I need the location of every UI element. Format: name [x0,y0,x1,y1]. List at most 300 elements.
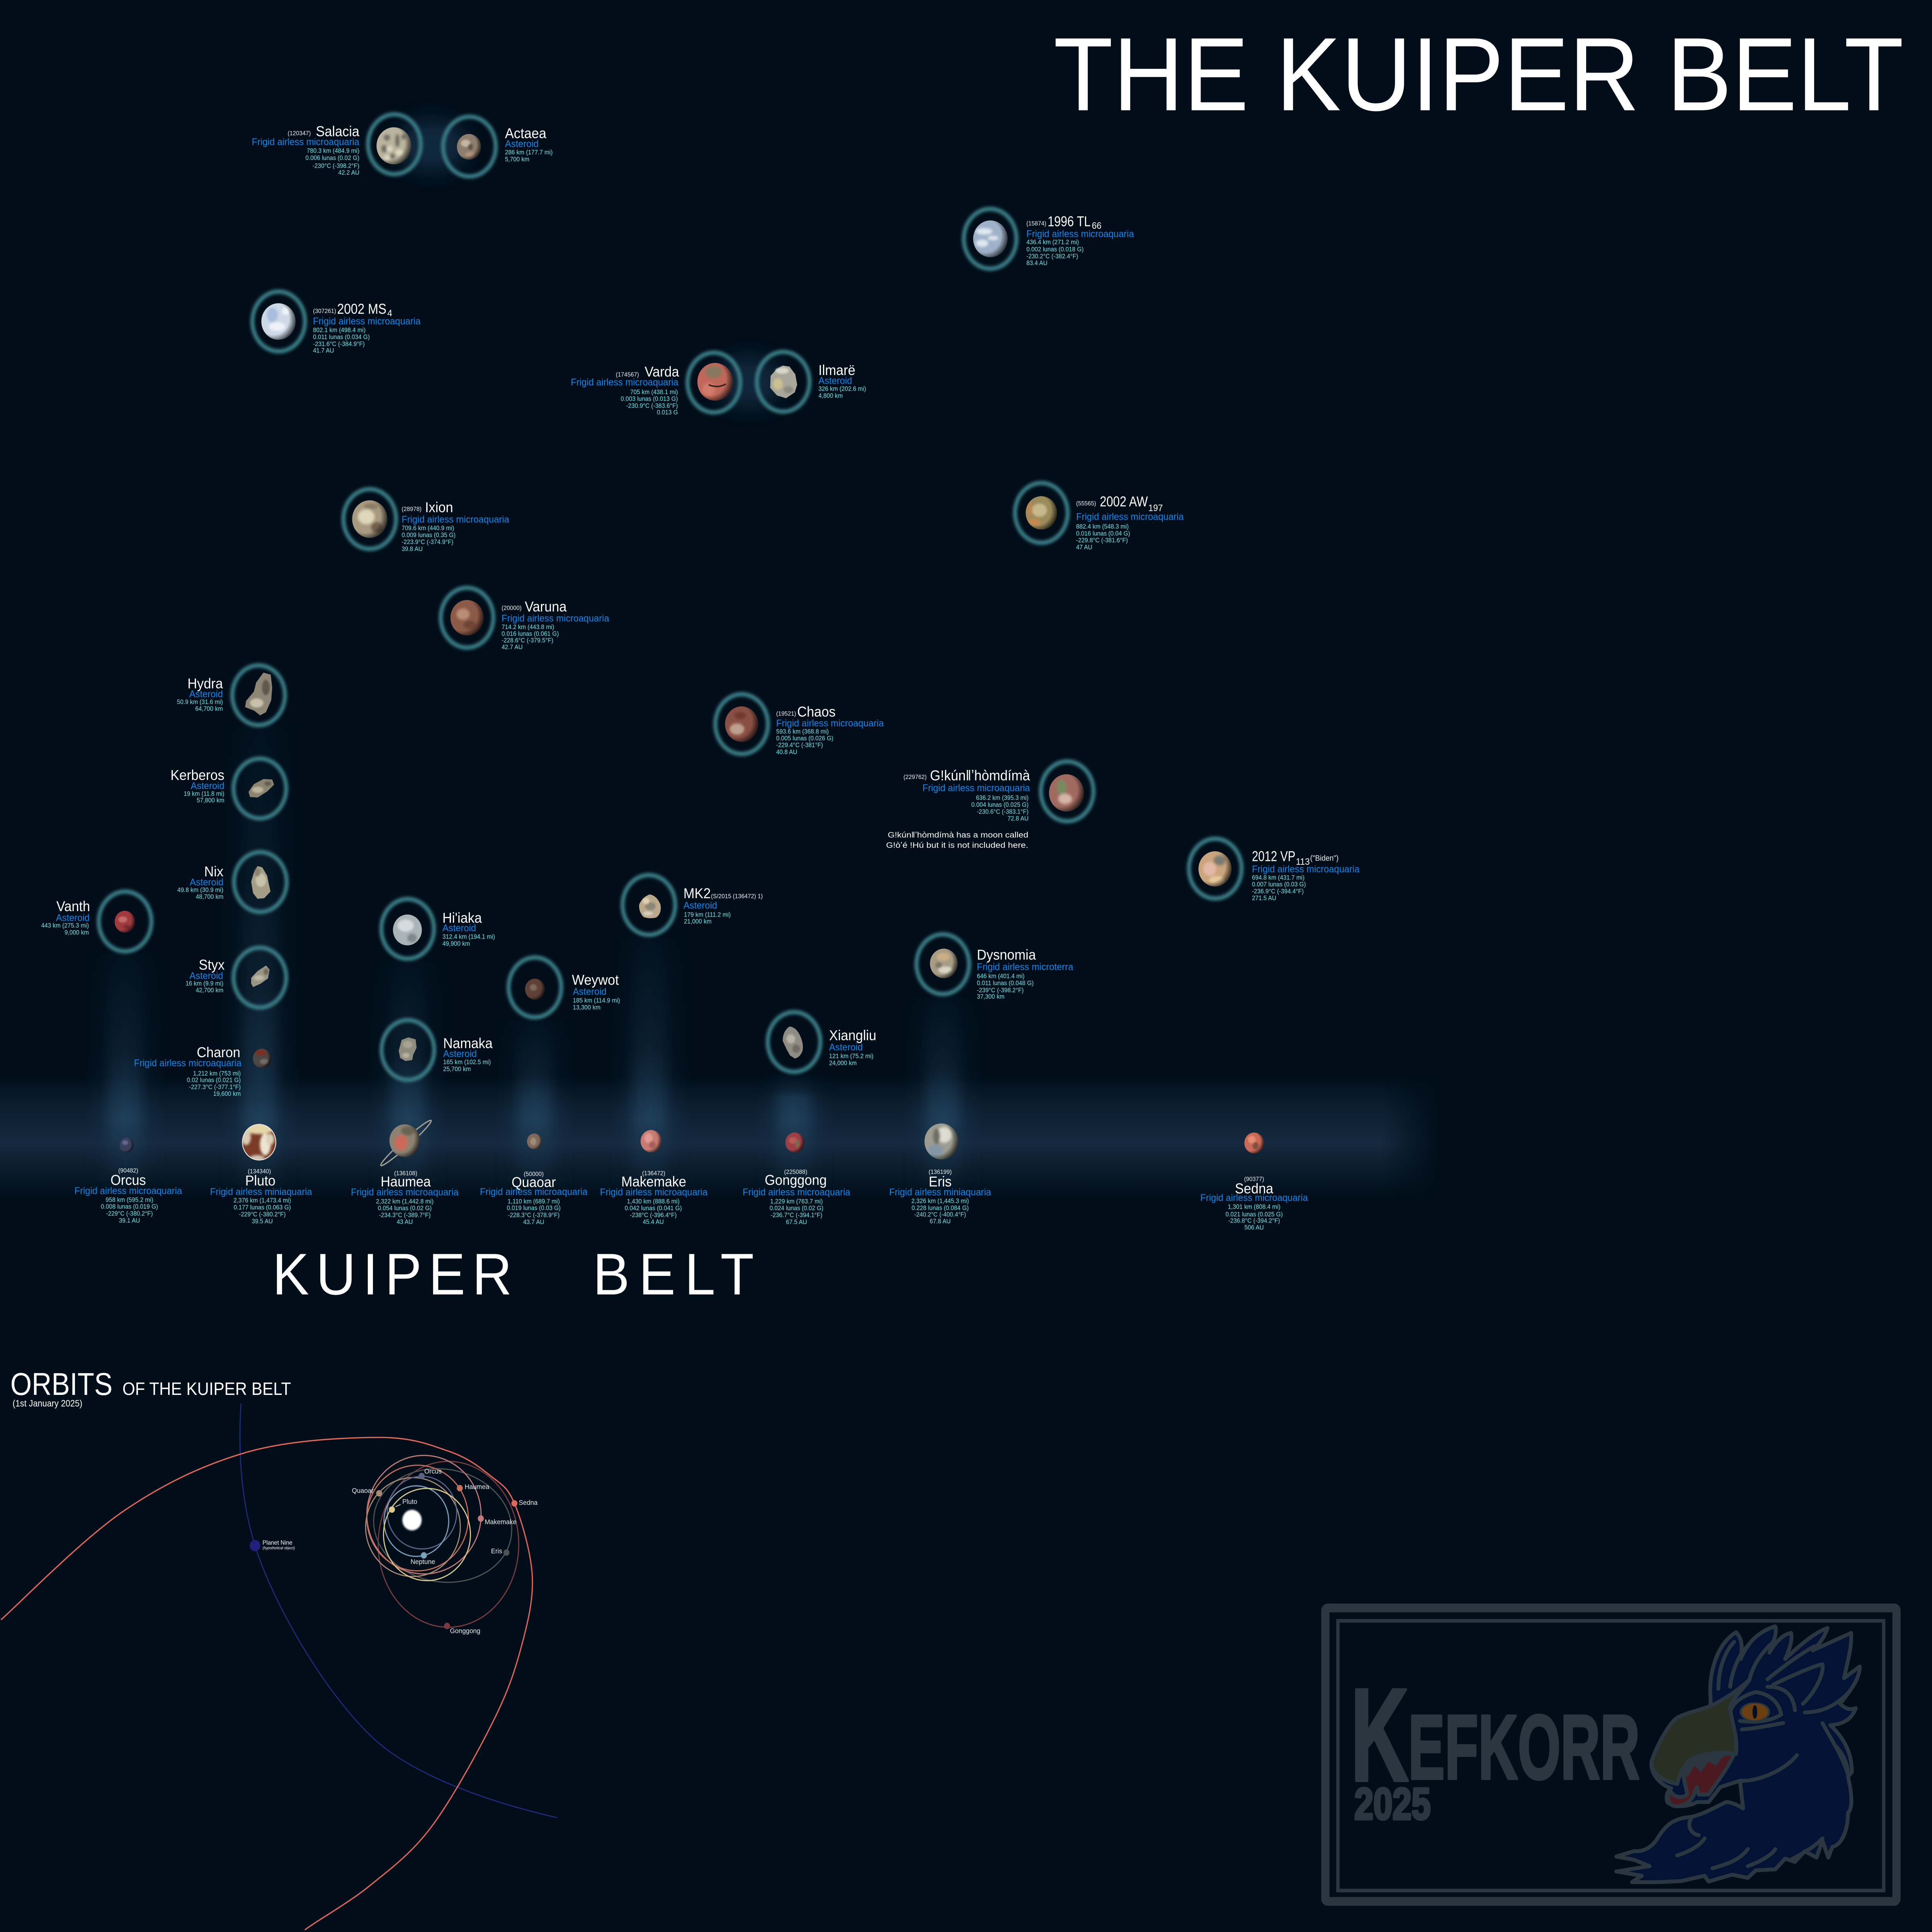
label: (20000) [502,605,522,612]
planet [527,1133,542,1150]
label: 0.007 lunas (0.03 G) [1252,881,1306,888]
label: MK2 [684,886,711,901]
marker: Planet Nine [250,1539,295,1551]
asteroid [783,1027,803,1058]
marker: Haumea: Haumea [464,1483,490,1490]
ring [379,1118,433,1168]
label: 271.5 AU [1252,895,1276,901]
label [571,364,679,416]
ring [1015,483,1068,543]
orbits heading: ORBITS [10,1366,112,1402]
label: -230.9°C (-383.6°F) [626,403,678,409]
ring [232,665,285,725]
orbit: Sedna [1,1437,532,1930]
label: 43 AU [397,1219,413,1225]
label: 0.011 lunas (0.034 G) [313,334,370,340]
note about moon: Gǃkúnǁʼhòmdímà has a moon called [888,831,1028,839]
label: 83.4 AU [1026,260,1048,267]
body: Hydra [177,665,285,725]
label: Frigid airless microaquaria [571,377,679,388]
label: Varda [645,364,679,380]
label: -231.6°C (-384.9°F) [313,341,365,347]
sun [402,1510,422,1531]
label: 42.7 AU [502,644,523,651]
mascot bird [1616,1626,1860,1882]
label: Orcus [111,1172,146,1188]
asteroid [248,779,274,798]
label [401,499,509,553]
label: Frigid airless microaquaria [313,316,421,327]
body: Gkunhomdima [903,762,1094,822]
marker: Quaoar [352,1486,382,1497]
body: Kerberos [170,759,286,818]
label: Hydra [187,675,223,692]
planet [241,1121,276,1162]
label: Frigid airless microaquaria [600,1187,707,1198]
marker: Pluto [389,1497,417,1513]
label [572,972,620,1011]
body: Weywot [509,957,620,1017]
label: 2012 VP [1252,849,1296,864]
marker: Gonggong [444,1623,480,1635]
label: 0.042 lunas (0.041 G) [625,1205,682,1212]
label: Chaos [797,704,835,720]
label: (55565) [1076,500,1096,507]
label: Ixion [425,499,453,515]
label: 5,700 km [505,156,529,163]
label: Asteroid [505,139,539,150]
label: Frigid airless microaquaria [134,1058,242,1069]
body: Styx [185,948,286,1007]
label: 1,430 km (888.6 mi) [627,1198,680,1205]
marker: Planet Nine: Planet Nine [262,1539,293,1546]
label: 0.004 lunas (0.025 G) [971,802,1029,808]
ring [1041,762,1094,821]
label [889,1169,991,1225]
label: -229.4°C (-381°F) [776,742,823,748]
label: -223.9°C (-374.9°F) [401,539,453,546]
label: 0.011 lunas (0.048 G) [977,980,1034,986]
planet [930,949,957,978]
label: 13,300 km [573,1004,600,1011]
label: Frigid airless microaquaria [1252,864,1360,875]
wordmark: K [1350,1661,1409,1809]
label: 21,000 km [684,918,712,925]
label: Asteroid [191,781,224,791]
label: 646 km (401.4 mi) [977,973,1025,980]
marker: Makemake: Makemake [485,1518,517,1526]
label: 709.6 km (440.9 mi) [401,525,454,532]
asteroid [251,966,270,987]
label: (28978) [401,506,422,513]
marker: Eris: Eris [491,1547,502,1555]
ring [252,292,305,351]
label: 882.4 km (548.3 mi) [1076,524,1129,530]
label: 2,376 km (1,473.4 mi) [233,1197,291,1204]
label: Styx [199,957,224,973]
Kuiper belt glow band [0,1087,1426,1185]
label: 45.4 AU [643,1219,664,1225]
label: Frigid airless microaquaria [922,783,1030,794]
body: Chaos [715,694,884,755]
label: Asteroid [443,1049,477,1060]
marker: Makemake [478,1515,517,1526]
label: Ilmarë [818,362,855,378]
watermark: Kefkorr 2025 [1325,1608,1896,1901]
label: Asteroid [442,923,476,934]
label [818,362,866,399]
orbit: Neptune [384,1486,449,1556]
label: 64,700 km [195,706,223,712]
label: 506 AU [1245,1225,1264,1231]
label [75,1167,182,1224]
wordmark [1350,1661,1640,1829]
label: -230.2°C (-382.4°F) [1026,253,1078,260]
label [252,124,359,176]
label: 286 km (177.7 mi) [505,149,553,156]
label [185,957,224,994]
label: 0.016 lunas (0.04 G) [1076,531,1130,537]
label: -230°C (-398.2°F) [313,163,359,170]
label: 50.9 km (31.6 mi) [177,699,223,706]
label: 39.8 AU [401,546,423,553]
label: (225088) [784,1169,807,1175]
asteroid [393,915,422,946]
label: Frigid airless microaquaria [776,718,884,729]
label: Nix [204,864,223,879]
label: -238°C (-396.4°F) [630,1212,677,1219]
ring [768,1012,820,1072]
label: -240.2°C (-400.4°F) [914,1211,966,1218]
label: Asteroid [829,1042,863,1053]
label: (15874) [1026,220,1046,227]
section label: KUIPER BELT: KUIPER [272,1242,512,1307]
label [684,886,763,925]
marker: Orcus: Orcus [424,1467,442,1475]
marker: Neptune: Neptune [410,1558,435,1565]
label: 1,229 km (763.7 mi) [770,1198,823,1205]
label: -227.3°C (-377.1°F) [189,1084,241,1091]
body: Dysnomia [917,934,1073,1000]
label: 66 [1092,220,1102,231]
label: 24,000 km [829,1060,857,1067]
orbit: Gonggong [378,1461,519,1627]
label: 436.4 km (271.2 mi) [1026,239,1079,246]
label: Frigid airless microaquaria [1076,512,1184,522]
ring [99,891,151,951]
label [443,1036,493,1073]
label [1076,494,1184,551]
label: Sedna [1235,1181,1274,1197]
orbits heading: OF THE KUIPER BELT [122,1379,291,1399]
label: 2,326 km (1,445.3 mi) [912,1198,969,1204]
asteroid [639,895,661,918]
orbits heading [10,1366,291,1408]
section label: KUIPER BELT: BELT [593,1242,754,1307]
body: Actaea [443,117,553,177]
planet [697,363,733,401]
marker: Orcus [418,1467,442,1479]
label [776,704,884,755]
label: 43.7 AU [523,1219,544,1226]
label: 0.005 lunas (0.026 G) [776,735,833,742]
label: 0.003 lunas (0.013 G) [621,396,678,402]
vertical glow columns [100,781,968,1180]
wordmark: EFKORR [1408,1696,1640,1798]
ring [344,489,396,549]
label: 0.008 lunas (0.019 G) [101,1204,158,1210]
label [313,301,421,354]
body: Ixion [344,489,509,553]
label: Asteroid [189,971,223,981]
label: 2002 AW [1100,494,1148,510]
body: 2002 AW197 [1015,483,1184,551]
label: Frigid airless miniaquaria [889,1187,991,1198]
planet [1244,1133,1264,1153]
label: Frigid airless microaquaria [252,137,359,148]
planet [770,366,797,398]
planet [973,220,1008,257]
label: -236.8°C (-394.2°F) [1228,1218,1280,1225]
body: Charon [134,1044,271,1097]
label: Hi'iaka [442,910,482,926]
label [134,1044,242,1097]
label: -229.8°C (-381.6°F) [1076,537,1128,544]
label: Namaka [443,1036,493,1051]
label: -229°C (-380.2°F) [106,1211,153,1217]
body: 1996 TL66 [964,209,1134,269]
ring [917,934,969,994]
label: (120347) [287,130,311,137]
label: 958 km (595.2 mi) [105,1197,153,1204]
label: 197 [1148,503,1163,513]
marker: Gonggong: Gonggong [450,1627,480,1635]
label: 636.2 km (395.3 mi) [976,795,1029,801]
ring [443,117,496,177]
body: Quaoar [480,1133,588,1226]
section label: KUIPER BELT [272,1242,754,1307]
label: Asteroid [189,689,223,700]
label: 694.8 km (431.7 mi) [1252,874,1304,881]
ring [622,875,675,935]
body: Orcus [75,1138,182,1224]
body: 2012 VP113 [1189,839,1360,901]
orbit: Makemake [367,1456,481,1574]
planet [1049,774,1084,811]
body: Sedna [1200,1133,1308,1231]
label: 39.1 AU [119,1218,140,1224]
label [600,1170,707,1225]
frame [1325,1608,1896,1901]
label [480,1171,588,1226]
label: Frigid airless microaquaria [351,1187,459,1198]
label: -230.6°C (-383.1°F) [977,809,1029,815]
label: ("Biden") [1310,854,1338,862]
label: 16 km (9.9 mi) [185,980,223,987]
body: Varuna [441,588,609,651]
label: 47 AU [1076,544,1092,551]
label: 2002 MS [337,301,386,317]
label: 0.024 lunas (0.02 G) [769,1205,823,1212]
body: Eris [889,1123,991,1225]
label: Gonggong [765,1172,827,1188]
label [1026,213,1134,267]
asteroid [251,866,270,899]
label: 57,800 km [197,797,224,804]
label: 121 km (75.2 mi) [829,1053,873,1060]
label: 49,900 km [442,940,470,947]
label: 0.177 lunas (0.063 G) [234,1204,291,1211]
asteroid [399,1037,417,1061]
planet [525,979,545,1000]
planet [924,1123,958,1160]
body: Pluto [210,1121,312,1225]
label: (90377) [1244,1176,1264,1183]
label: 67.5 AU [786,1219,807,1226]
marker: Quaoar: Quaoar [352,1486,374,1494]
label: Asteroid [56,913,90,923]
label: 0.006 lunas (0.02 G) [305,155,359,162]
label: 780.3 km (484.9 mi) [307,148,359,154]
moon pair glow: Varda and Ilmare [715,356,782,408]
label: Makemake [621,1174,686,1190]
label: 443 km (275.3 mi) [41,922,89,929]
label: Frigid airless miniaquaria [210,1187,312,1197]
orbit: Haumea [367,1465,468,1571]
label: Varuna [525,599,567,615]
planet [785,1133,804,1153]
label: 802.1 km (498.4 mi) [313,327,366,333]
label: -239°C (-398.2°F) [977,987,1024,994]
body: Ilmare [757,352,866,412]
label: Asteroid [573,986,607,997]
label [829,1027,876,1067]
label: Vanth [56,898,90,914]
label: 714.2 km (443.8 mi) [502,624,554,631]
label [743,1169,850,1226]
ring [509,957,561,1017]
label: Salacia [316,124,359,139]
label: 0.016 lunas (0.061 G) [502,631,559,637]
label: 0.002 lunas (0.018 G) [1026,246,1083,253]
planet [641,1130,662,1152]
body: Hi'iaka [381,899,495,959]
label: Frigid airless microaquaria [480,1187,588,1197]
label: -236.7°C (-394.1°F) [770,1212,822,1219]
planet [451,600,484,636]
orbits heading: (1st January 2025) [12,1398,82,1408]
label: (S/2015 (136472) 1) [711,893,763,900]
label: 0.054 lunas (0.02 G) [378,1205,432,1212]
label: 67.8 AU [930,1218,951,1225]
body: Namaka [382,1020,493,1080]
label: 312.4 km (194.1 mi) [442,934,495,940]
orbit: Quaoar [366,1478,460,1577]
marker: Haumea [457,1483,490,1492]
planet [457,134,481,160]
label: (229762) [903,774,927,781]
body: Haumea [351,1118,459,1225]
planet [261,303,296,340]
planet [389,1124,420,1157]
label [502,599,609,651]
orbit: Pluto [383,1488,471,1581]
label: 0.228 lunas (0.084 G) [912,1205,969,1211]
planet [352,500,387,538]
label: 705 km (438.1 mi) [630,389,678,396]
planet [376,127,411,164]
asteroid [245,673,272,715]
label: 1996 TL [1048,213,1090,230]
planet [115,911,135,933]
label: -228.6°C (-379.5°F) [502,637,553,644]
body: Vanth [41,891,151,951]
label [177,864,223,900]
label: 2,322 km (1,442.8 mi) [376,1198,434,1205]
orbit diagram [1,1403,557,1930]
label: (19521) [776,711,796,717]
label: Asteroid [190,877,223,888]
label: Frigid airless microaquaria [1026,229,1134,240]
label: 1,212 km (753 mi) [193,1070,241,1077]
label: 0.021 lunas (0.025 G) [1226,1211,1283,1218]
label [1252,849,1360,901]
planet [119,1138,134,1153]
marker: Sedna: Sedna [519,1498,538,1507]
label: (90482) [118,1167,138,1174]
label: (136199) [929,1169,952,1175]
label: 42.2 AU [338,170,359,176]
label: 326 km (202.6 mi) [818,386,866,392]
label: Frigid airless microaquaria [401,514,509,525]
ring [1189,839,1242,898]
marker: Pluto: Pluto [402,1497,417,1505]
body: Nix [177,852,287,912]
label: Actaea [505,125,546,141]
label: 113 [1296,856,1310,867]
label: Eris [929,1174,952,1190]
ring [441,588,493,648]
label: Asteroid [818,376,852,386]
body: Xiangliu [768,1012,876,1072]
label [170,767,224,804]
body: Salacia [252,114,421,176]
label: Frigid airless microterra [977,962,1073,973]
label: Frigid airless microaquaria [502,613,609,624]
label: 19 km (11.8 mi) [184,791,224,797]
body: Varda [571,353,740,416]
label: 0.009 lunas (0.35 G) [401,532,456,539]
label: Dysnomia [977,947,1036,963]
body: Gonggong [743,1133,850,1226]
label [351,1170,459,1225]
label: Frigid airless microaquaria [75,1185,182,1196]
ring [382,1020,434,1080]
note about moon [886,831,1028,850]
label [442,910,495,947]
label: 179 km (111.2 mi) [684,912,731,918]
body: MK2 [622,875,763,935]
wordmark: 2025 [1354,1779,1430,1829]
label: 165 km (102.5 mi) [443,1059,491,1066]
label: 4 [387,308,392,318]
label: 4,800 km [818,393,843,399]
moon pair glow: Salacia and Actaea [396,120,468,171]
label: 49.8 km (30.9 mi) [177,887,223,894]
planet [253,1049,271,1068]
label [903,767,1030,822]
label: -228.3°C (-378.9°F) [508,1212,560,1219]
